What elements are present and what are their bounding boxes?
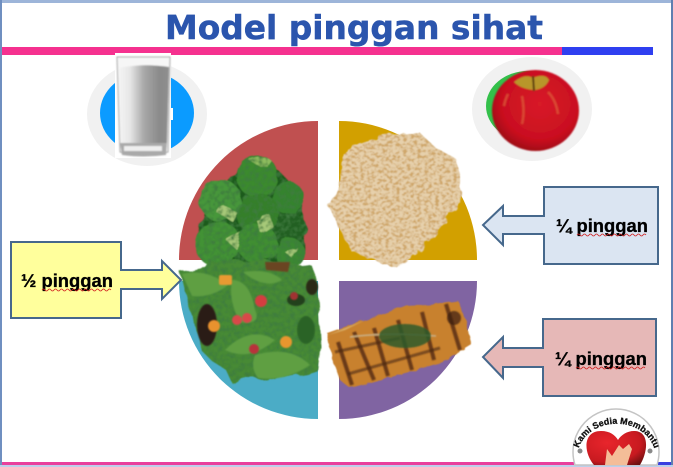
food: spinach salad: [180, 260, 321, 383]
title underline bar: [2, 47, 653, 55]
icon: apple: [492, 70, 579, 151]
salad garnish: [208, 275, 298, 354]
callout: quarter plate protein: ¼ pinggan: [555, 349, 647, 369]
quadrant: protein: [339, 281, 477, 419]
quadrant: vegetables top: [179, 121, 318, 260]
callout: quarter plate protein: [483, 319, 656, 396]
dark leaf shadows: [197, 262, 318, 346]
icon: glass of milk: [117, 57, 170, 156]
plate quadrants: [179, 121, 477, 419]
title: Model pinggan sihat: [165, 8, 543, 47]
logo: Kami Sedia Membantu: Kami Sedia Membantu: [573, 417, 659, 448]
milk plate icon: [87, 53, 207, 166]
callout: half plate: [11, 242, 181, 318]
callout: quarter plate grains: [483, 187, 658, 264]
food: broccoli: [195, 155, 306, 268]
callout: quarter plate grains: ¼ pinggan: [556, 216, 648, 236]
logo: Kami Sedia Membantu: [572, 408, 660, 466]
fruit plate icon: [472, 57, 592, 161]
lighter leaves: [182, 271, 310, 379]
food: grilled salmon: [327, 301, 471, 388]
icon: heart with hand: [586, 431, 646, 465]
quadrant: vegetables bottom: [179, 281, 318, 419]
food: brown rice: [329, 133, 461, 268]
callout: half plate: ½ pinggan: [21, 271, 113, 291]
quadrant: grains: [339, 121, 477, 260]
